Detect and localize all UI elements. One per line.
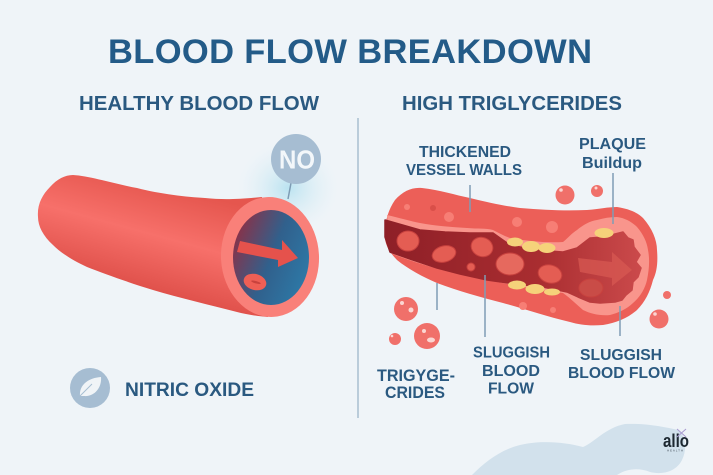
leader lines <box>437 173 620 337</box>
label: thickened vessel walls <box>406 144 522 179</box>
title: BLOOD FLOW BREAKDOWN <box>108 33 592 71</box>
label: sluggish blood flow center: BLOOD <box>482 363 540 380</box>
label: sluggish blood flow center: SLUGGISH <box>473 344 550 362</box>
flow arrow <box>237 240 298 267</box>
label: sluggish blood flow right: SLUGGISH <box>580 347 662 364</box>
nitric oxide legend <box>70 368 254 408</box>
vessel opening ring <box>218 195 322 319</box>
flow arrow <box>578 252 632 286</box>
label: plaque buildup: PLAQUE <box>579 136 646 153</box>
label: thickened vessel walls: THICKENED <box>419 144 511 161</box>
label: sluggish blood flow center <box>473 344 550 398</box>
heading: healthy blood flow: HEALTHY BLOOD FLOW <box>79 93 319 115</box>
logo: allo health: HEALTH <box>667 448 683 452</box>
heading: high triglycerides: HIGH TRIGLYCERIDES <box>402 93 622 115</box>
NO badge <box>271 134 321 199</box>
label: triglycerides <box>377 367 455 402</box>
label: thickened vessel walls: VESSEL WALLS <box>406 162 522 179</box>
wall speckles <box>404 204 558 313</box>
inner wall lining <box>387 215 649 315</box>
label: nitric oxide: NITRIC OXIDE <box>125 380 254 401</box>
plaque deposits <box>507 228 614 296</box>
floating triglyceride droplets <box>389 185 671 349</box>
red blood cell <box>242 271 268 293</box>
label: sluggish blood flow right: BLOOD FLOW <box>568 365 676 382</box>
outer wall <box>385 188 657 325</box>
vessel body <box>38 175 268 317</box>
vessel lumen <box>233 210 309 305</box>
background blob <box>472 424 685 475</box>
lumen <box>385 220 641 303</box>
red blood cells <box>397 231 603 297</box>
logo: allo health: allo <box>663 431 689 451</box>
label: sluggish blood flow right <box>568 347 676 382</box>
icon: leaf <box>70 368 110 408</box>
panel: diseased vessel <box>385 188 657 325</box>
label: sluggish blood flow center: FLOW <box>488 380 535 398</box>
label: plaque buildup <box>579 136 646 172</box>
label: triglycerides: CRIDES <box>385 384 445 402</box>
label: triglycerides: TRIGYGE- <box>377 367 455 385</box>
NO badge: NO <box>279 144 315 174</box>
panel: healthy vessel <box>38 134 338 319</box>
label: plaque buildup: Buildup <box>582 155 642 172</box>
